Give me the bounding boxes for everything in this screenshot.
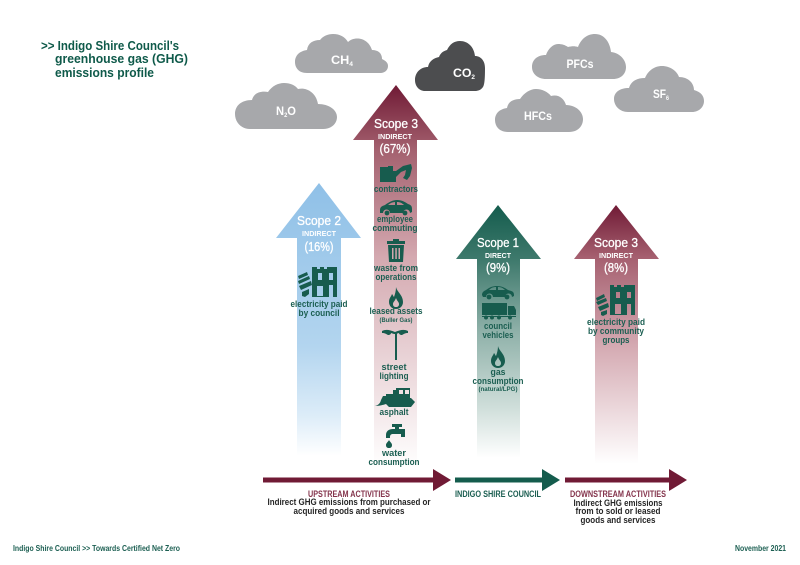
label: upstream activities: [268, 489, 431, 516]
icon: flame: [491, 346, 505, 368]
title: emissions profile: [55, 66, 154, 80]
arrow: Scope 1: council: [484, 321, 512, 332]
arrow: Scope 1: (9%): [486, 260, 510, 275]
footer: date: November 2021: [735, 544, 786, 553]
arrow: Scope 3 upstream: INDIRECT: [378, 132, 412, 141]
arrow: Scope 1: gas: [490, 367, 506, 378]
arrow: Scope 3 downstream: groups: [602, 335, 630, 346]
arrow: Scope 3 downstream: electricity paid: [587, 317, 645, 328]
arrow: Scope 3 downstream: by community: [588, 326, 645, 337]
label: downstream activities: DOWNSTREAM ACTIVITIES: [570, 489, 666, 499]
arrow: Scope 1: DIRECT: [485, 251, 511, 260]
arrow: Scope 3 upstream: operations: [376, 272, 416, 283]
arrow: Scope 1: vehicles: [482, 330, 514, 341]
label: Indigo Shire Council: INDIGO SHIRE COUNCIL: [455, 489, 541, 499]
arrow: Scope 3 downstream: (8%): [604, 260, 628, 275]
cloud: N2O: [235, 83, 337, 129]
cloud: SF6: 6: [666, 96, 670, 102]
cloud: HFCs: [495, 89, 583, 132]
icon: car: [482, 286, 514, 297]
arrow: Scope 2: (16%): [304, 239, 334, 254]
icon: bulb and building: [298, 267, 337, 297]
icon: car: [380, 200, 412, 213]
arrow: Scope 3 downstream: Scope 3: [594, 235, 638, 250]
cloud: N2O: O: [287, 106, 296, 118]
icon: street light: [382, 330, 408, 360]
arrow: Scope 2: Scope 2: [297, 213, 341, 228]
cloud: CO2: CO: [453, 68, 470, 80]
arrow: Scope 3 upstream: street: [382, 362, 407, 373]
cloud: PFCs: PFCs: [566, 59, 594, 71]
icon: water tap: [386, 424, 405, 448]
icon: truck: [482, 303, 516, 317]
cloud: SF6: [614, 66, 704, 112]
label: upstream activities: Indirect GHG emissions from purchased or: [268, 497, 431, 507]
arrow: Scope 3 upstream: commuting: [372, 223, 418, 234]
arrow: Scope 1: consumption: [472, 376, 524, 387]
arrow: Scope 2: by council: [298, 308, 340, 319]
cloud: SF6: SF: [653, 89, 668, 101]
title: greenhouse gas (GHG): [55, 52, 188, 66]
cloud: PFCs: [532, 34, 626, 79]
label: upstream activities: UPSTREAM ACTIVITIES: [308, 489, 390, 499]
cloud: CO2: 2: [471, 75, 476, 81]
cloud: N2O: N: [276, 106, 284, 118]
arrow: Scope 3 upstream: (67%): [380, 141, 410, 156]
arrow: Scope 1: [456, 205, 541, 458]
label: downstream activities: from to sold or leased: [576, 506, 660, 516]
label: upstream activities: acquired goods and services: [294, 506, 404, 516]
title: [41, 39, 188, 80]
label: downstream activities: [570, 489, 666, 525]
arrow: Scope 3 upstream: Scope 3: [374, 116, 418, 131]
arrow: Scope 2: electricity paid: [290, 299, 348, 310]
arrow: Scope 3 upstream: consumption: [368, 457, 420, 468]
title: >> Indigo Shire Council's: [41, 39, 179, 53]
icon: bulldozer: [375, 388, 415, 407]
arrow: Scope 3 upstream: leased assets: [370, 306, 422, 317]
arrow: Scope 3 downstream: [574, 205, 659, 464]
arrow: Scope 2: INDIRECT: [302, 229, 336, 238]
cloud: CH4: CH: [331, 55, 348, 67]
arrow: Indigo Shire Council: [455, 469, 560, 491]
arrow: Scope 1: (natural/LPG): [478, 386, 518, 393]
icon: excavator: [380, 164, 412, 182]
icon: bulb and building: [596, 285, 635, 316]
arrow: upstream activities: [263, 469, 451, 491]
arrow: Scope 1: Scope 1: [477, 235, 519, 250]
arrow: Scope 3 upstream: asphalt: [380, 407, 409, 418]
arrow: Scope 3 upstream: lighting: [380, 371, 409, 382]
arrow: Scope 3 upstream: waste from: [373, 263, 418, 274]
cloud: N2O: 2: [284, 113, 288, 119]
arrow: downstream activities: [565, 469, 687, 491]
label: downstream activities: goods and services: [580, 515, 656, 525]
cloud: CO2: [415, 41, 485, 91]
arrow: Scope 3 upstream: [353, 85, 438, 468]
cloud: HFCs: HFCs: [524, 111, 552, 123]
label: downstream activities: Indirect GHG emissions: [574, 498, 662, 508]
footer: left: Indigo Shire Council >> Towards Certified Net Zero: [13, 544, 180, 553]
arrow: Scope 2: [276, 183, 361, 456]
icon: flame: [389, 287, 403, 309]
icon: waste bin: [387, 239, 405, 262]
arrow: Scope 3 upstream: contractors: [374, 184, 418, 195]
arrow: Scope 3 downstream: INDIRECT: [599, 251, 633, 260]
arrow: Scope 3 upstream: (Buller Gas): [380, 317, 412, 324]
cloud: CH4: [295, 34, 388, 73]
arrow: Scope 3 upstream: water: [381, 448, 406, 459]
cloud: CH4: 4: [349, 62, 354, 68]
arrow: Scope 3 upstream: employee: [377, 214, 413, 225]
